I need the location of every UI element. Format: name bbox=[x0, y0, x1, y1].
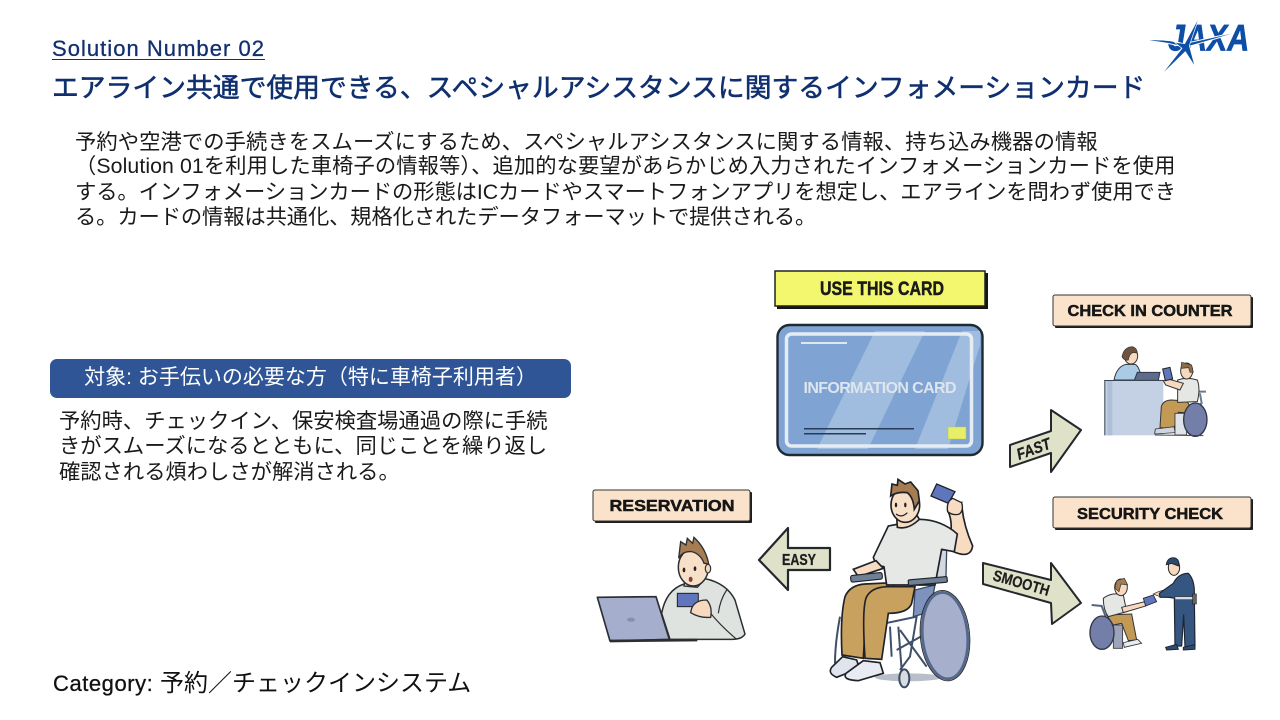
description text block: する。インフォメーションカードの形態はICカードやスマートフォンアプリを想定し、エアラインを問わず使用でき bbox=[75, 180, 1176, 204]
arrow: smooth bbox=[983, 563, 1081, 624]
seated traveller bbox=[1090, 578, 1146, 649]
arrow: fast: FAST bbox=[1015, 435, 1054, 464]
illustration: security check scene bbox=[1090, 558, 1196, 650]
body bbox=[662, 579, 745, 639]
legs bbox=[841, 583, 915, 659]
banner: use this card: USE THIS CARD bbox=[820, 279, 944, 300]
illustration: reservation man with laptop bbox=[597, 537, 745, 641]
information card: INFORMATION CARD bbox=[804, 380, 956, 397]
caster wheel bbox=[898, 627, 909, 687]
label: check in counter: CHECK IN COUNTER bbox=[1068, 303, 1233, 320]
desk bbox=[1104, 380, 1163, 435]
left forearm bbox=[853, 561, 883, 577]
card bbox=[677, 593, 698, 607]
arrow: easy bbox=[759, 528, 830, 590]
agent bbox=[1114, 347, 1141, 380]
benefit text block: きがスムーズになるとともに、同じことを繰り返し bbox=[59, 434, 547, 458]
JAXA logo: JAXA bbox=[1168, 16, 1249, 58]
label: security check bbox=[1053, 497, 1253, 530]
shadow bbox=[875, 673, 942, 681]
arrow: fast bbox=[1010, 410, 1081, 472]
label: security check: SECURITY CHECK bbox=[1077, 506, 1223, 523]
description text block: る。カードの情報は共通化、規格化されたデータフォーマットで提供される。 bbox=[75, 205, 816, 229]
shirt bbox=[873, 519, 957, 585]
illustration: check in counter scene bbox=[1104, 347, 1207, 436]
armrests bbox=[850, 572, 947, 586]
description text block: 予約や空港での手続きをスムーズにするため、スペシャルアシスタンスに関する情報、持ち込み機器の情報 bbox=[75, 130, 1098, 154]
arrow: smooth: SMOOTH bbox=[991, 568, 1051, 600]
card in hand bbox=[931, 484, 955, 503]
description text block bbox=[75, 130, 1176, 229]
raised arm bbox=[948, 503, 973, 554]
JAXA logo bbox=[1149, 16, 1249, 76]
laptop bbox=[1134, 372, 1160, 380]
shoes bbox=[830, 657, 883, 681]
label: check in counter bbox=[1053, 295, 1253, 328]
information card bbox=[778, 325, 982, 455]
hand bbox=[691, 600, 711, 617]
head bbox=[678, 537, 711, 587]
big wheel bbox=[916, 588, 974, 683]
target audience pill: 対象: お手伝いの必要な方（特に車椅子利用者） bbox=[84, 366, 537, 389]
title: エアライン共通で使用できる、スペシャルアシスタンスに関するインフォメーションカード bbox=[52, 73, 1145, 103]
laptop bbox=[597, 597, 697, 641]
section number heading: Solution Number 02 bbox=[52, 36, 265, 61]
wheelchair frame back bbox=[932, 550, 947, 580]
head bbox=[891, 479, 920, 528]
arrow: easy: EASY bbox=[782, 552, 816, 569]
label: reservation bbox=[593, 490, 752, 523]
category label: Category: 予約／チェックインシステム bbox=[53, 670, 471, 697]
benefit text block: 確認される煩わしさが解消される。 bbox=[59, 460, 400, 484]
description text block: （Solution 01を利用した車椅子の情報等）、追加的な要望があらかじめ入力されたインフォメーションカードを使用 bbox=[75, 154, 1175, 178]
hand bbox=[947, 498, 962, 515]
benefit text block: 予約時、チェックイン、保安検査場通過の際に手続 bbox=[59, 409, 548, 433]
illustration: main wheelchair user holding card bbox=[830, 479, 974, 687]
label: reservation: RESERVATION bbox=[610, 498, 734, 515]
banner: use this card bbox=[775, 271, 988, 309]
card bbox=[1143, 595, 1157, 606]
target audience pill bbox=[50, 359, 571, 398]
traveller at counter bbox=[1155, 362, 1207, 436]
benefit text block bbox=[59, 409, 548, 484]
security officer bbox=[1153, 558, 1196, 650]
